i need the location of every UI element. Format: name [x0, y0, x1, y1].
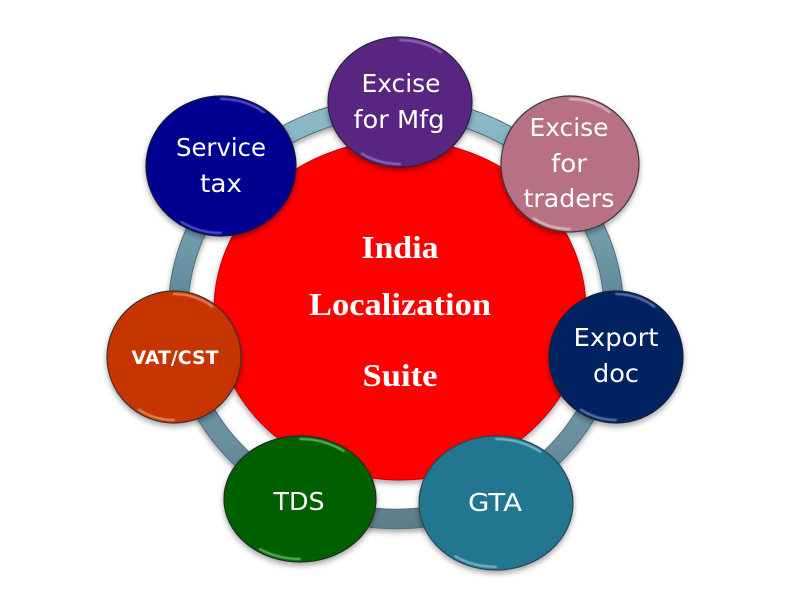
node: Excise for traders: for	[551, 149, 588, 178]
node: Service tax: Service	[176, 133, 266, 162]
central title: Suite	[362, 357, 438, 393]
node: Service tax	[146, 96, 296, 236]
node: VAT/CST	[107, 291, 241, 423]
central title: India	[362, 229, 438, 265]
node: Service tax: tax	[200, 169, 242, 198]
node: GTA	[419, 436, 573, 570]
node: Excise for Mfg	[328, 37, 472, 167]
central title: Localization	[309, 286, 491, 322]
node: Export doc	[549, 291, 683, 423]
node: Excise for traders: traders	[524, 184, 614, 213]
node: Excise for Mfg: for Mfg	[354, 105, 444, 134]
node: GTA: GTA	[468, 488, 522, 517]
node: Export doc: doc	[593, 359, 639, 388]
central circle	[214, 140, 586, 480]
node: TDS: TDS	[272, 487, 324, 516]
node: Excise for Mfg: Excise	[362, 69, 440, 98]
node: Excise for traders: Excise	[530, 113, 608, 142]
central title	[309, 229, 491, 393]
node: VAT/CST: VAT/CST	[132, 347, 219, 369]
node: TDS	[224, 436, 376, 562]
ring	[178, 107, 614, 519]
node: Excise for traders	[501, 96, 639, 232]
node: Export doc: Export	[574, 323, 659, 352]
